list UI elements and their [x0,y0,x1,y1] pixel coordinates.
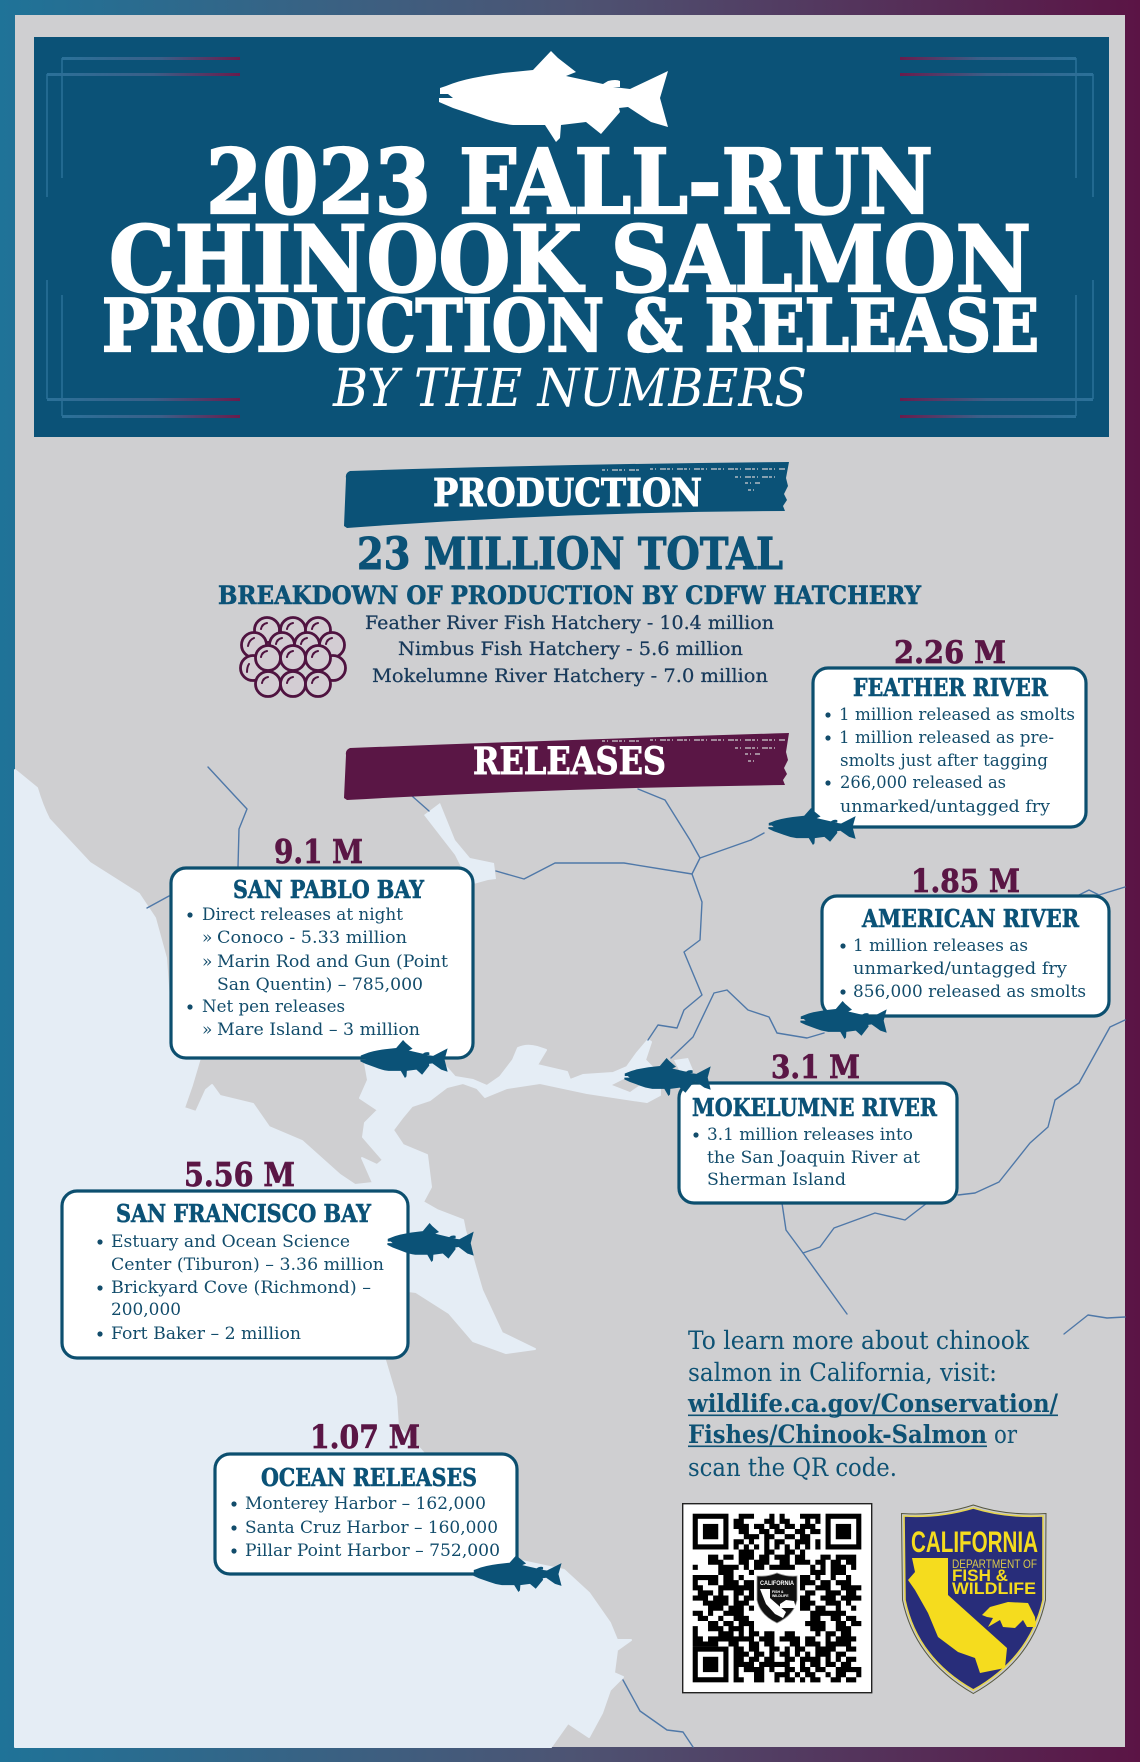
callout: san pablo bay: Marin Rod and Gun (Point [217,952,448,972]
callout: san pablo bay: » [202,952,212,972]
callout: san francisco bay: 5.56 M [184,1155,295,1194]
callout: san francisco bay: 200,000 [111,1300,181,1320]
qr centre logo: CALIFORNIA [760,1580,794,1587]
ocean and bay water [15,770,660,1747]
icon: fish marker mokelumne river [624,1058,711,1096]
callout: ocean releases: Monterey Harbor – 162,000 [245,1494,486,1514]
production section [218,462,922,696]
learn more text: scan the QR code. [688,1453,897,1482]
breakdown heading: BREAKDOWN OF PRODUCTION BY CDFW HATCHERY [218,581,922,610]
callout: feather river: smolts just after tagging [840,751,1048,771]
callout: american river: 856,000 released as smolts [853,982,1086,1002]
callout: san pablo bay: SAN PABLO BAY [233,875,425,904]
callout: san pablo bay: Direct releases at night [202,905,403,925]
callout: american river: 1 million releases as [853,936,1028,956]
callout: ocean releases [215,1418,517,1574]
callout: san pablo bay: San Quentin) – 785,000 [217,975,423,995]
callout: feather river: FEATHER RIVER [853,673,1049,702]
title: 2023 FALL-RUN [206,129,933,234]
callout: mokelumne river: 3.1 M [771,1048,860,1086]
callout: feather river: 266,000 released as [840,773,1006,793]
callout: ocean releases: OCEAN RELEASES [261,1463,477,1492]
logo: california department of fish and wildlife [902,1505,1046,1694]
qr centre logo: WILDLIFE [772,1594,789,1598]
callout: feather river: unmarked/untagged fry [840,797,1050,817]
callout: san francisco bay [62,1155,408,1358]
qr centre logo [757,1573,797,1623]
callout: american river: unmarked/untagged fry [853,959,1067,979]
learn more text [687,1326,1059,1482]
hatchery list [365,612,774,687]
logo: california department of fish and wildlife: WILDLIFE [952,1579,1036,1598]
callout: san pablo bay [171,832,473,1058]
subtitle: BY THE NUMBERS [332,359,807,419]
banner: releases [344,733,789,800]
callout: san francisco bay: Brickyard Cove (Richmond) – [111,1278,371,1298]
rivers [147,767,1125,1747]
icon: white salmon [439,51,668,142]
callout: american river: AMERICAN RIVER [861,904,1080,933]
banner: production [344,462,789,528]
title [102,129,1039,368]
qr code [683,1504,872,1693]
hatchery list: Feather River Fish Hatchery - 10.4 million [365,612,774,634]
callout: ocean releases: Santa Cruz Harbor – 160,000 [245,1518,498,1538]
header background [34,37,1109,437]
learn more text: Fishes/Chinook-Salmon [688,1420,987,1449]
callout: san francisco bay: SAN FRANCISCO BAY [116,1199,372,1228]
callout: san pablo bay: Net pen releases [202,997,345,1017]
callout: mokelumne river: the San Joaquin River at [707,1148,920,1168]
callout: mokelumne river [679,1048,957,1203]
callout: mokelumne river: Sherman Island [707,1170,846,1190]
small delta water [674,1058,693,1072]
california shape [908,1558,1007,1673]
icon: fish marker feather river [768,808,856,845]
callout: san francisco bay: Fort Baker – 2 million [111,1324,301,1344]
qr centre logo: FISH & [772,1590,784,1594]
total production: 23 MILLION TOTAL [357,529,783,580]
callout: ocean releases: 1.07 M [310,1418,420,1456]
learn more text: salmon in California, visit: [688,1358,997,1387]
callout: ocean releases: Pillar Point Harbor – 752,000 [245,1541,500,1561]
callout: mokelumne river: 3.1 million releases into [707,1125,913,1145]
header panel [34,37,1109,437]
delta island [612,1078,640,1092]
banner: releases: RELEASES [473,739,666,783]
title: CHINOOK SALMON [109,207,1031,313]
icon: fish marker american river [800,1001,887,1039]
icon: fish marker san pablo bay [360,1040,448,1078]
callout: san pablo bay: » [202,1020,212,1040]
learn more text: or [994,1420,1017,1449]
learn more text: wildlife.ca.gov/Conservation/ [687,1389,1059,1418]
callout: feather river: 1 million released as pre- [839,728,1054,748]
icon: fish marker ocean releases [473,1555,562,1592]
hatchery list: Mokelumne River Hatchery - 7.0 million [372,665,768,687]
logo: california department of fish and wildlife: FISH & [952,1566,1008,1585]
icon: salmon roe [240,618,346,696]
callout: san pablo bay: » [202,928,212,948]
hatchery list: Nimbus Fish Hatchery - 5.6 million [398,638,743,660]
learn more text: To learn more about chinook [688,1326,1030,1355]
icon: fish marker san francisco bay [387,1223,474,1262]
callout: mokelumne river: MOKELUMNE RIVER [692,1093,938,1122]
callout: american river: 1.85 M [911,862,1020,900]
callout: san pablo bay: 9.1 M [274,832,363,871]
callout: american river [822,862,1109,1016]
callout: san francisco bay: Center (Tiburon) – 3.36 million [111,1255,384,1275]
logo: california department of fish and wildlife: DEPARTMENT OF [952,1559,1037,1571]
callout: feather river: 1 million released as smolts [839,705,1075,725]
callout: san francisco bay: Estuary and Ocean Science [111,1232,350,1252]
logo: california department of fish and wildlife: CALIFORNIA [911,1526,1038,1559]
callout: feather river: 2.26 M [894,635,1006,671]
callout: san pablo bay: Conoco - 5.33 million [217,928,407,948]
header corner brackets [47,57,1093,418]
bear [982,1602,1036,1628]
callout: san pablo bay: Mare Island – 3 million [217,1020,420,1040]
napa river water [424,803,496,885]
banner: production: PRODUCTION [433,470,702,515]
callout: feather river [813,635,1086,827]
